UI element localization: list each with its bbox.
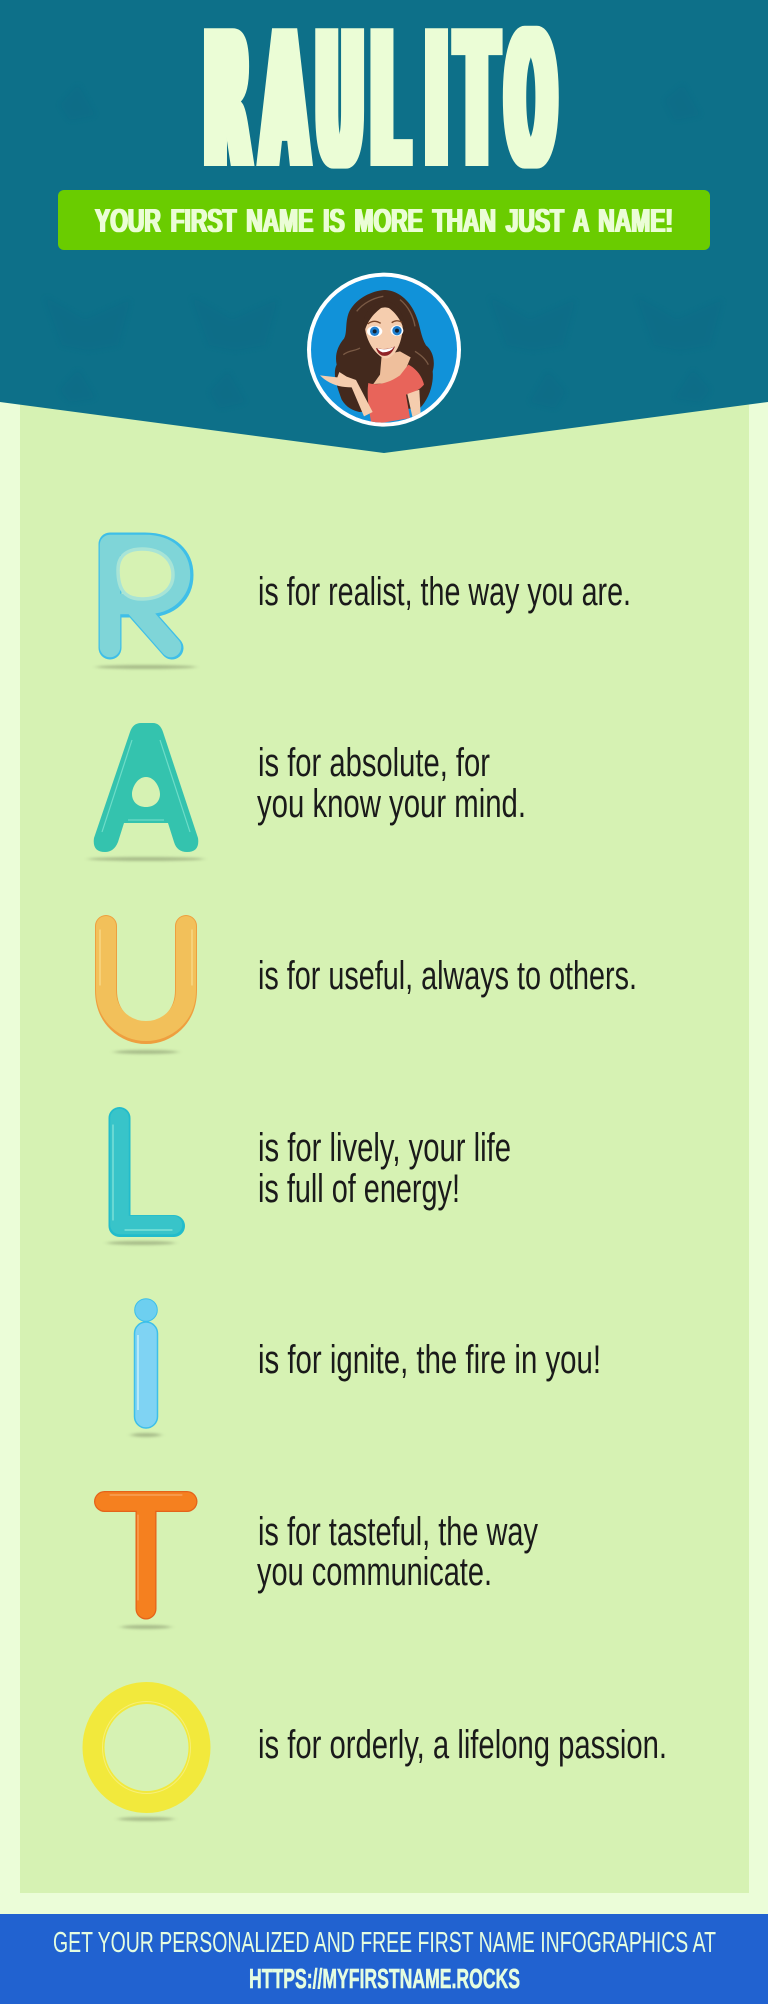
text: T [257, 1510, 538, 1594]
letter T [104, 1495, 187, 1629]
text: A: is for absolute, for [258, 741, 490, 785]
row: letter I [131, 1299, 601, 1437]
text: A: you know your mind. [257, 782, 526, 826]
text: R: is for realist, the way you are. [258, 570, 631, 614]
letter L [107, 1118, 175, 1245]
letter R [96, 544, 196, 669]
row: letter L [107, 1118, 511, 1245]
row: letter A [88, 723, 526, 861]
tagline bar [58, 190, 710, 250]
row: letter T [104, 1495, 538, 1629]
text: L: is full of energy! [258, 1167, 460, 1211]
icon: avatar portrait [307, 273, 461, 427]
footer line 2: HTTPS://MYFIRSTNAME.ROCKS [249, 1963, 520, 1994]
text: L [258, 1126, 511, 1211]
letter I [131, 1299, 161, 1437]
text: T: is for tasteful, the way [258, 1510, 538, 1554]
text: I: is for ignite, the fire in you! [258, 1338, 601, 1382]
text: T: you communicate. [257, 1550, 492, 1594]
header banner [0, 0, 768, 453]
letter O [94, 1693, 200, 1821]
row: letter U [100, 926, 637, 1054]
row: letter O [94, 1693, 667, 1821]
row: letter R [96, 544, 631, 669]
text: A [257, 741, 526, 826]
panel: letters background [20, 380, 749, 1893]
letter A [88, 723, 204, 861]
letter U [100, 926, 192, 1054]
text: L: is for lively, your life [258, 1126, 511, 1170]
footer [0, 1914, 768, 2004]
